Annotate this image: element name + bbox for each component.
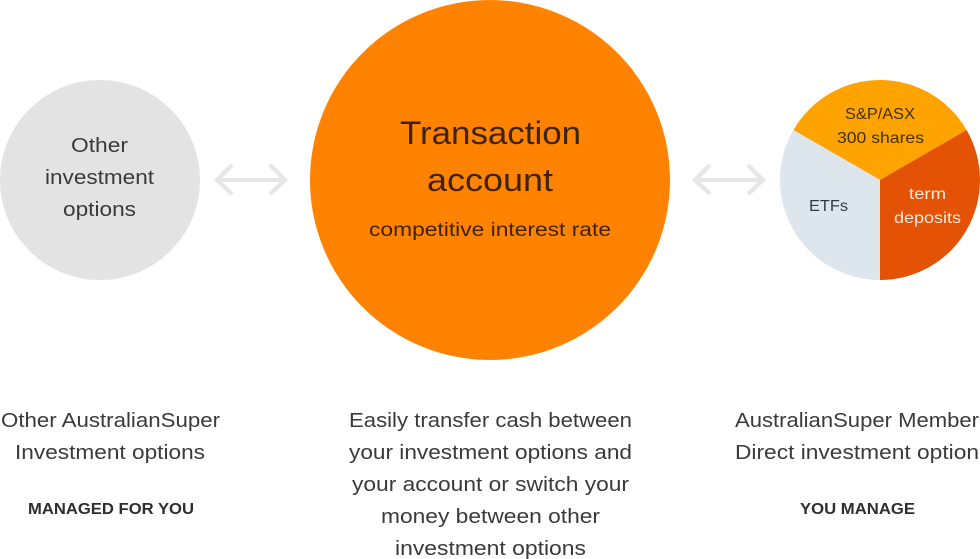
text block: other investment options [1,410,220,518]
pie slice: term deposits [880,130,980,280]
text block: member direct option: Direct investment option [735,442,979,464]
pie slice: S&P/ASX 300 shares [793,80,967,180]
text block: transfer description [349,410,632,559]
pie slice: ETFs: ETFs [809,198,848,215]
pie slice: term deposits: term [909,186,946,203]
text block: member direct option [735,410,979,518]
text block: transfer description: your account or switch your [352,474,629,496]
panel: other investment options circle: Other [71,135,128,157]
panel: transaction account circle: account [427,162,553,198]
panel: other investment options circle: options [63,199,136,221]
panel: other investment options circle [0,80,200,280]
chart: member direct pie [780,80,980,280]
pie slice: S&P/ASX 300 shares: 300 shares [837,130,924,147]
text block: other investment options: Other AustralianSuper [1,410,220,432]
text block: member direct option: AustralianSuper Member [735,410,979,432]
panel: transaction account circle: competitive interest rate [369,220,611,241]
label: you manage: YOU MANAGE [800,501,915,518]
pie slice: ETFs [780,130,880,280]
text block: other investment options: Investment options [15,442,205,464]
pie slice: term deposits: deposits [894,210,961,227]
text block: transfer description: money between other [381,506,600,528]
text block: transfer description: your investment options and [349,442,632,464]
panel: transaction account circle: Transaction [400,115,581,151]
label: managed for you: MANAGED FOR YOU [28,501,194,518]
text block: transfer description: Easily transfer cash between [349,410,632,432]
pie slice: S&P/ASX 300 shares: S&P/ASX [845,106,915,123]
panel: other investment options circle: investment [45,167,154,189]
arrow: right double arrow [695,165,763,194]
arrow: left double arrow [217,165,285,194]
panel: transaction account circle [310,0,670,360]
